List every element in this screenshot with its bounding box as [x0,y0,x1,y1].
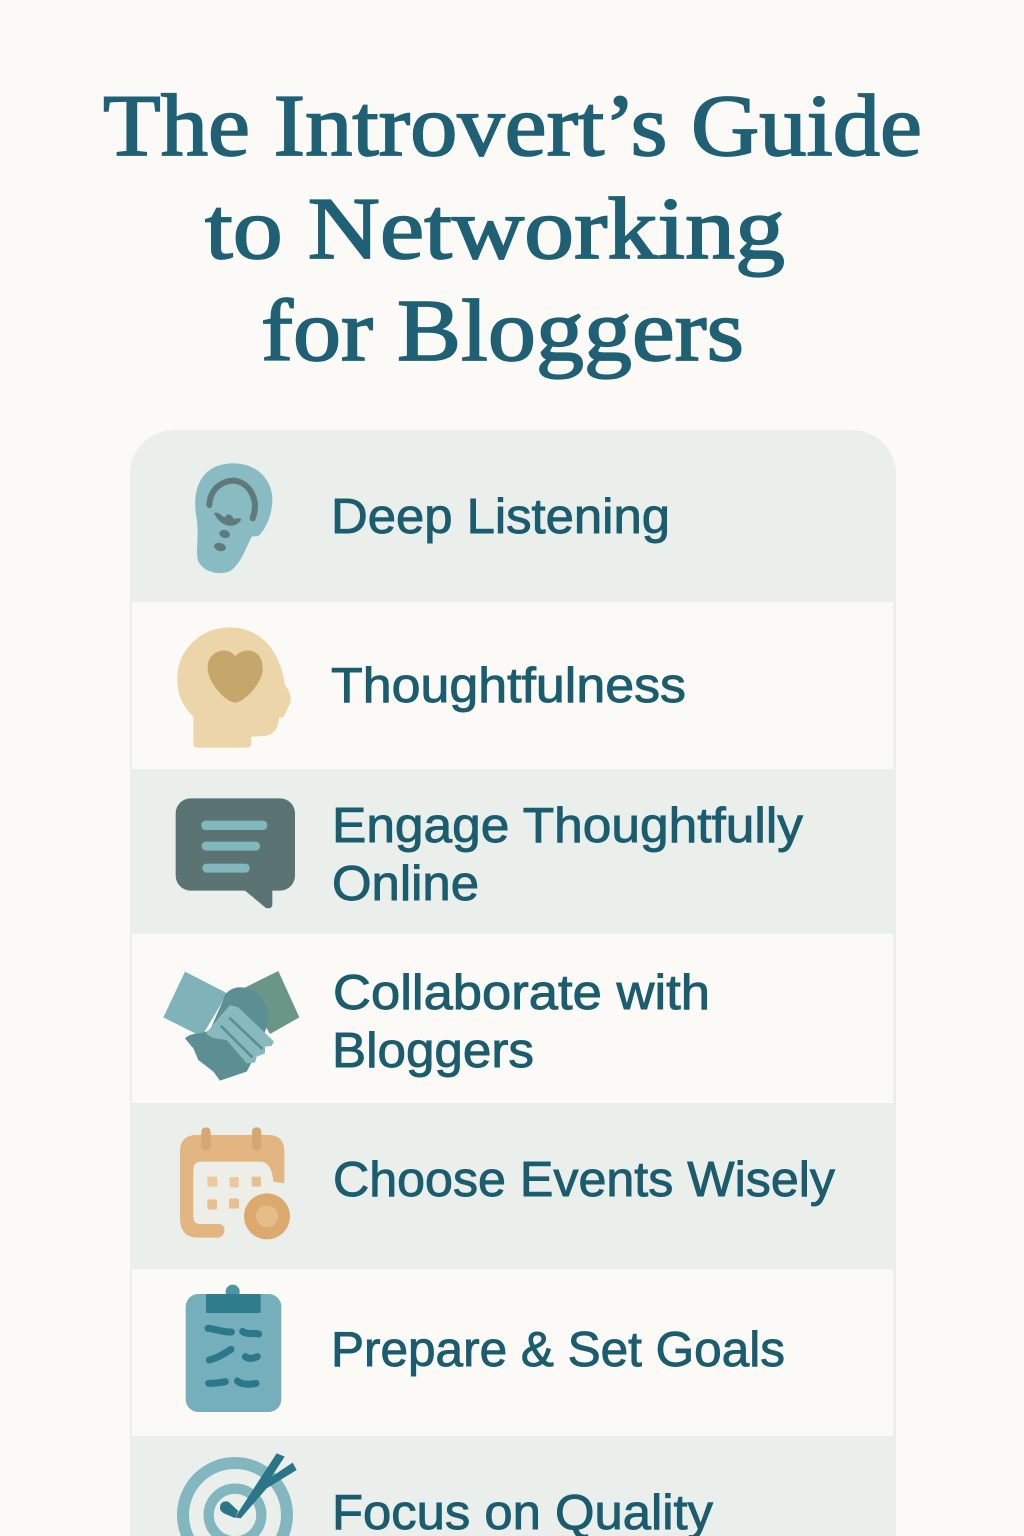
icon: clipboard [186,1285,281,1412]
label: choose events wisely: Choose Events Wisely [333,1153,836,1207]
icon: head with heart [177,627,291,748]
title [103,78,922,380]
label: collaborate with bloggers: Bloggers [332,1024,534,1078]
label: thoughtfulness: Thoughtfulness [331,659,686,713]
label: engage thoughtfully online: Online [332,857,479,911]
title: for Bloggers [261,283,744,380]
row: thoughtfulness [177,627,686,748]
row: focus on quality [183,1453,714,1536]
label: engage thoughtfully online [332,799,804,911]
row: prepare and set goals [186,1285,785,1412]
icon: calendar [180,1127,290,1239]
label: collaborate with bloggers [332,966,710,1078]
label: prepare and set goals: Prepare & Set Goals [331,1323,785,1377]
label: deep listening: Deep Listening [331,490,670,544]
title: The Introvert’s Guide [103,78,922,175]
icon: ear [195,463,272,573]
icon: handshake [163,971,299,1081]
panel: tips list [130,430,896,1536]
row: engage thoughtfully online [176,798,804,911]
icon: target with check [183,1453,297,1536]
row: deep listening [195,463,670,573]
row: choose events wisely [180,1127,835,1239]
row: collaborate with bloggers [163,966,710,1081]
label: collaborate with bloggers: Collaborate with [333,966,710,1020]
title: to Networking [205,181,785,278]
label: engage thoughtfully online: Engage Thoughtfully [332,799,804,853]
icon: speech bubble [176,798,295,908]
